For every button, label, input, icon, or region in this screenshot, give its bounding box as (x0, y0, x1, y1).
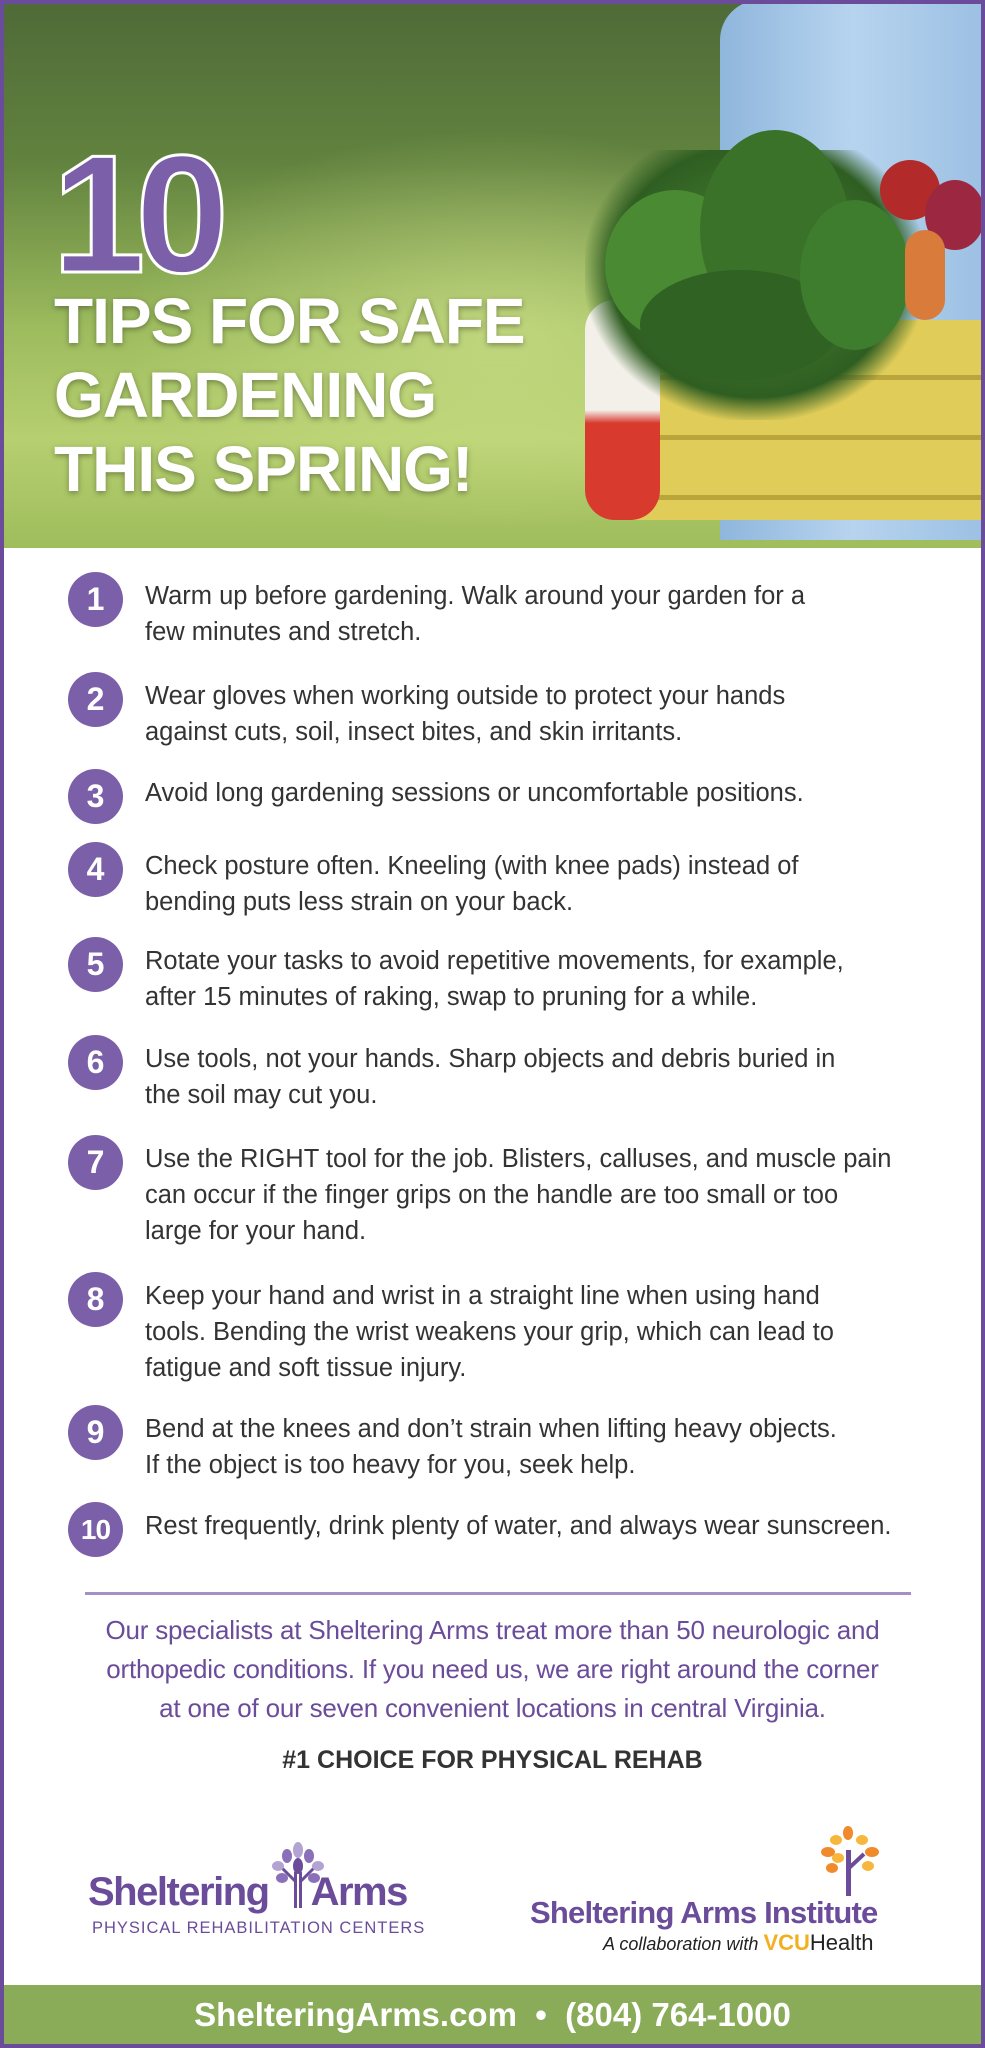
tip 7 (68, 1135, 891, 1245)
closing paragraph: orthopedic conditions. If you need us, we are right around the corner (106, 1654, 879, 1684)
title number: 10 (52, 120, 219, 308)
logo: Sheltering Arms Institute: Sheltering Arms Institute (530, 1895, 877, 1930)
tips list: the soil may cut you. (145, 1081, 377, 1109)
tips list: Use the RIGHT tool for the job. Blisters, calluses, and muscle pain (145, 1145, 891, 1173)
tip 6 (68, 1035, 835, 1109)
footer bar: ShelteringArms.com • (804) 764-1000 (194, 1996, 791, 2033)
tips list: fatigue and soft tissue injury. (145, 1354, 466, 1382)
closing paragraph: Our specialists at Sheltering Arms treat more than 50 neurologic and (105, 1615, 880, 1645)
tips list (68, 572, 892, 1557)
crate (615, 320, 985, 520)
logo: Sheltering Arms: PHYSICAL REHABILITATION CENTERS (92, 1919, 425, 1937)
footer bar (0, 1985, 985, 2048)
icon: purple tree (272, 1842, 324, 1908)
tips list: 9 (87, 1414, 104, 1450)
logo: Sheltering Arms: Sheltering Arms (88, 1870, 407, 1914)
tips list: 7 (87, 1144, 104, 1180)
tips list: 3 (87, 778, 104, 814)
vegetables (880, 160, 940, 220)
logo: Sheltering Arms Institute (530, 1826, 879, 1955)
tips list: Keep your hand and wrist in a straight line when using hand (145, 1282, 820, 1310)
tips list: after 15 minutes of raking, swap to pruning for a while. (145, 983, 757, 1011)
tip 8 (68, 1272, 834, 1382)
tips list: Check posture often. Kneeling (with knee pads) instead of (145, 852, 798, 880)
logo: Sheltering Arms (88, 1842, 425, 1937)
tips list: 10 (81, 1514, 110, 1545)
closing paragraph: at one of our seven convenient locations in central Virginia. (159, 1693, 826, 1723)
tips list: 5 (87, 946, 104, 982)
tips list: 4 (87, 851, 104, 887)
tips list: Warm up before gardening. Walk around your garden for a (145, 582, 805, 610)
tip 10 (68, 1502, 892, 1557)
tip 4 (68, 842, 798, 916)
closing paragraph (105, 1615, 880, 1723)
tips list: 8 (87, 1281, 104, 1317)
tips list: large for your hand. (145, 1217, 366, 1245)
tips list: bending puts less strain on your back. (145, 888, 573, 916)
logo: Sheltering Arms Institute: A collaboration with VCUHealth (603, 1930, 873, 1955)
title text: TIPS FOR SAFE (54, 285, 525, 357)
tip 3 (68, 769, 804, 824)
tips list: few minutes and stretch. (145, 618, 421, 646)
hero photo (0, 0, 985, 548)
tips list: Use tools, not your hands. Sharp objects and debris buried in (145, 1045, 835, 1073)
tip 5 (68, 937, 844, 1011)
tips list: Wear gloves when working outside to protect your hands (145, 682, 785, 710)
person shirt (720, 0, 985, 540)
tips list: 6 (87, 1044, 104, 1080)
tips list: can occur if the finger grips on the handle are too small or too (145, 1181, 838, 1209)
tips list: Rest frequently, drink plenty of water, and always wear sunscreen. (145, 1512, 892, 1540)
title text (52, 285, 526, 505)
tips list: 1 (87, 581, 104, 617)
title (52, 120, 526, 505)
tip 2 (68, 672, 785, 746)
greens (585, 150, 925, 420)
title text: THIS SPRING! (54, 433, 472, 505)
tip 9 (68, 1405, 837, 1479)
tips list: If the object is too heavy for you, seek help. (145, 1451, 635, 1479)
tips list: Bend at the knees and don’t strain when lifting heavy objects. (145, 1415, 837, 1443)
title text: GARDENING (54, 359, 436, 431)
tips list: against cuts, soil, insect bites, and skin irritants. (145, 718, 682, 746)
tips list: tools. Bending the wrist weakens your grip, which can lead to (145, 1318, 834, 1346)
tips list: Avoid long gardening sessions or uncomfortable positions. (145, 779, 804, 807)
tip 1 (68, 572, 806, 646)
glove (585, 300, 660, 520)
tagline: #1 CHOICE FOR PHYSICAL REHAB (282, 1746, 703, 1774)
tips list: Rotate your tasks to avoid repetitive movements, for example, (145, 947, 844, 975)
icon: orange tree (821, 1826, 879, 1896)
tips list: 2 (87, 681, 104, 717)
